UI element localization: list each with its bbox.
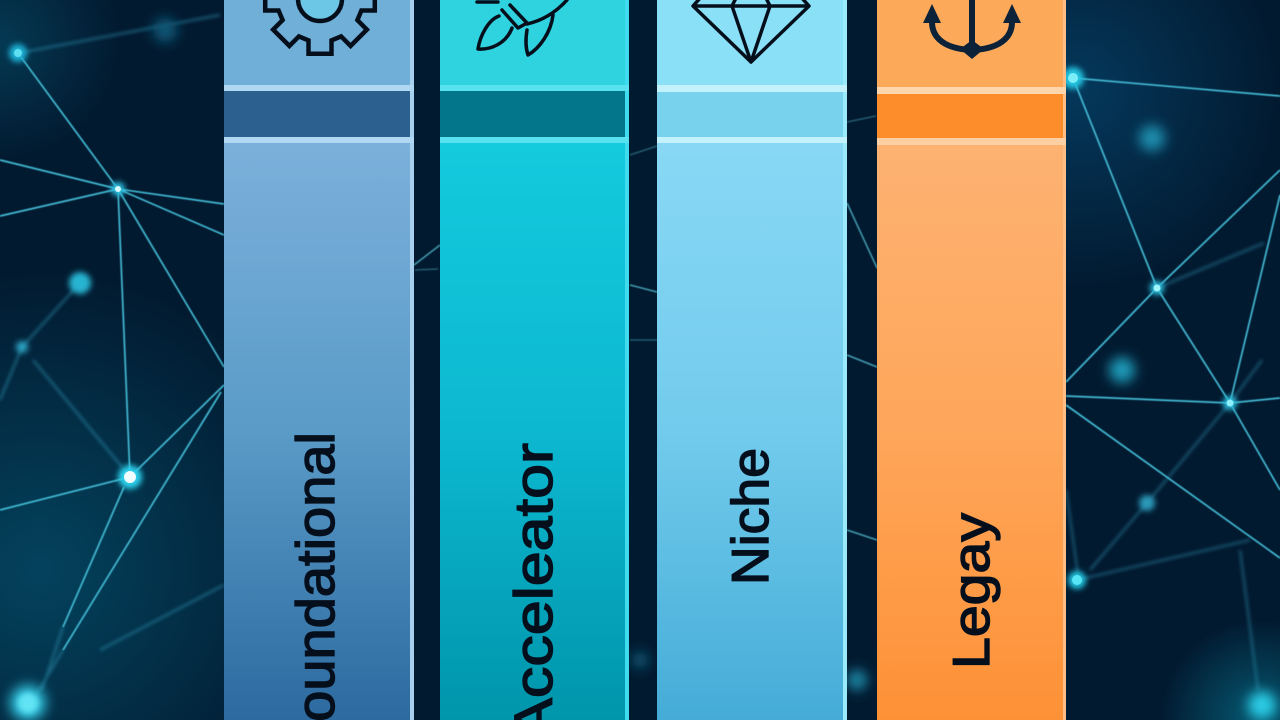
network lines: left, bright bbox=[0, 53, 224, 650]
panel: Legacy column bbox=[877, 0, 1066, 720]
network nodes: right bbox=[632, 67, 1276, 719]
label: Legay: Legay bbox=[943, 513, 1001, 669]
label: Niche: Niche bbox=[722, 448, 780, 585]
panel: Niche column bbox=[657, 0, 847, 720]
icon: anchor bbox=[923, 0, 1021, 59]
icon: rocket bbox=[477, 0, 567, 55]
horizontal divider strips bbox=[224, 85, 629, 143]
icon: gear bbox=[265, 0, 375, 54]
network lines: left, faint bbox=[0, 15, 224, 695]
panel: Foundational column bbox=[224, 0, 414, 720]
network lines: gaps between columns bbox=[414, 116, 877, 540]
icon: diamond bbox=[693, 0, 809, 62]
panel: Accelerator column bbox=[440, 0, 629, 720]
network lines: right, bright bbox=[1066, 78, 1280, 558]
network nodes: left bbox=[9, 18, 177, 720]
network lines: right, faint bbox=[1066, 243, 1264, 690]
